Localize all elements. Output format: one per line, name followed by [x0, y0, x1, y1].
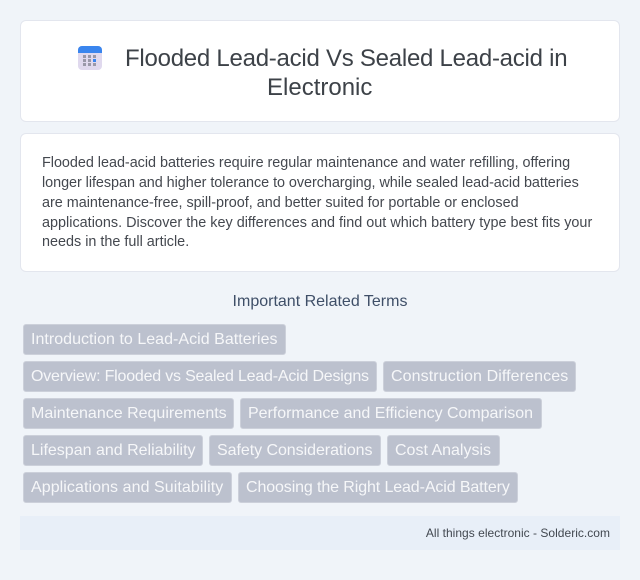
- tag: Performance and Efficiency Comparison: [248, 405, 533, 422]
- panel: tags: [23, 324, 576, 503]
- icon: calendar: [78, 46, 102, 70]
- title: Electronic: [267, 74, 372, 101]
- tag: Applications and Suitability: [31, 479, 223, 496]
- tag: Lifespan and Reliability: [31, 442, 196, 459]
- tag: Overview: Flooded vs Sealed Lead-Acid Designs: [31, 368, 369, 385]
- panel: title card: [20, 20, 620, 122]
- tag: [23, 361, 377, 392]
- tag: [209, 435, 381, 466]
- footer: All things electronic - Solderic.com: [426, 526, 610, 540]
- heading: related terms: Important Related Terms: [233, 293, 407, 310]
- description text: are maintenance-free, spill-proof, and better suited for portable or enclosed: [42, 195, 519, 211]
- tag: Cost Analysis: [395, 442, 491, 459]
- title: Flooded Lead-acid Vs Sealed Lead-acid in: [125, 45, 567, 72]
- title: [125, 45, 567, 101]
- tag: Maintenance Requirements: [31, 405, 227, 422]
- panel: description: [20, 133, 620, 272]
- tag: [387, 435, 500, 466]
- tag: [23, 435, 203, 466]
- description text: applications. Discover the key differences and find out which battery type best fits your: [42, 215, 592, 231]
- description text: needs in the full article.: [42, 234, 189, 250]
- description text: longer lifespan and higher tolerance to overcharging, while sealed lead-acid batteries: [42, 175, 579, 191]
- tag: [238, 472, 518, 503]
- tag: [23, 324, 286, 355]
- description text: [42, 155, 592, 250]
- tag: Construction Differences: [391, 368, 568, 385]
- tag: Safety Considerations: [217, 442, 372, 459]
- footer: [20, 516, 620, 550]
- tag: Choosing the Right Lead-Acid Battery: [246, 479, 510, 496]
- tag: [383, 361, 576, 392]
- tag: [23, 398, 234, 429]
- tag: [240, 398, 542, 429]
- tag: [23, 472, 232, 503]
- description text: Flooded lead-acid batteries require regular maintenance and water refilling, offering: [42, 155, 570, 171]
- tag: Introduction to Lead-Acid Batteries: [31, 331, 278, 348]
